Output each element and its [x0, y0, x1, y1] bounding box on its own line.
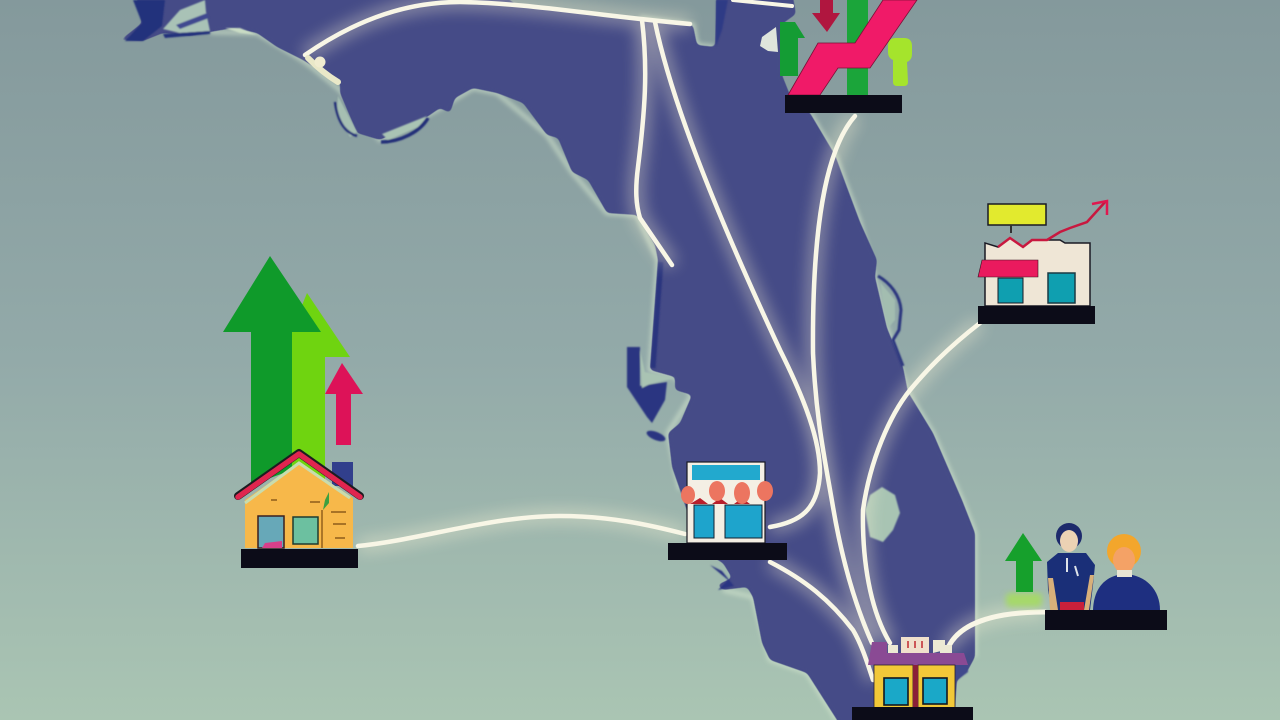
right window [923, 678, 947, 704]
icon: south twin shops [852, 637, 973, 720]
route: top east stripe [733, 0, 792, 6]
person one [1047, 523, 1095, 610]
window [725, 505, 762, 538]
tall green arrow [223, 256, 321, 485]
route: east shop to south shops [863, 323, 980, 643]
pink trend arrow [788, 0, 917, 95]
route: panhandle to north junction [305, 2, 690, 55]
glow behind route lines [305, 2, 1045, 680]
cedar key streak [710, 565, 734, 590]
coastal island near arrow [760, 27, 778, 52]
window [293, 517, 318, 544]
awning red accents [690, 498, 750, 504]
lime arrow [292, 293, 350, 480]
tampa bay pocket [627, 347, 667, 423]
route: people to south shops [947, 612, 1045, 650]
red down arrow [812, 0, 840, 32]
route: north junction to central storefront [655, 22, 820, 527]
green up arrow [780, 22, 805, 76]
building [985, 238, 1090, 306]
panhandle sand bar [225, 28, 257, 35]
person two [1093, 534, 1160, 610]
platform [785, 95, 902, 113]
yellow sign [988, 204, 1046, 233]
barrier island west [337, 96, 357, 137]
route: chart to south shops [813, 116, 872, 643]
barrier island south [382, 116, 427, 140]
west coast shade [653, 262, 661, 368]
small key [645, 429, 667, 443]
building [687, 462, 765, 543]
icon: house with growth arrows [223, 256, 363, 568]
crimson arrow [325, 363, 363, 445]
tall green bar [847, 0, 868, 95]
icon: rising chart on platform [760, 0, 917, 113]
route lines [305, 0, 1045, 680]
route ends white tabs [888, 640, 952, 653]
red trend line [998, 201, 1106, 247]
door [258, 516, 284, 548]
platform [668, 543, 787, 560]
window right [1048, 273, 1075, 303]
lime base [1006, 593, 1042, 607]
lake [865, 487, 900, 542]
south bump [955, 665, 968, 682]
siding marks [271, 500, 346, 548]
awning [978, 260, 1038, 277]
awning scallops [681, 481, 773, 504]
platform [852, 707, 973, 720]
platform [978, 306, 1095, 324]
icon: east shop with rising trend [978, 201, 1107, 324]
route: house to storefront [358, 516, 685, 546]
house wall [245, 462, 353, 548]
chimney [332, 462, 353, 486]
dark strip by north notch [716, 0, 728, 46]
panhandle lagoon [163, 0, 210, 33]
pink doormat [262, 541, 282, 548]
platform [1045, 610, 1167, 630]
lime marker [888, 38, 912, 86]
red arrow head [1092, 201, 1107, 215]
left window [884, 678, 908, 705]
roof [238, 453, 360, 503]
sign band [692, 465, 760, 480]
window left [998, 278, 1023, 303]
leaf [323, 492, 329, 510]
platform [241, 549, 358, 568]
icon: workers with up arrow [1005, 523, 1167, 630]
map details [125, 0, 968, 682]
route: storefront to south shops [770, 562, 873, 680]
coast halo [210, 18, 975, 720]
divider door [913, 665, 918, 708]
green arrow [1005, 533, 1042, 592]
dark strip and left shade [125, 0, 210, 41]
roof [868, 642, 968, 665]
node: panhandle marker [308, 56, 338, 82]
map: Florida [118, 0, 975, 720]
sign [901, 637, 929, 653]
icon: central storefront [668, 462, 787, 560]
right unit [918, 665, 955, 708]
door [694, 505, 714, 538]
east coast island [880, 282, 895, 328]
left unit [874, 665, 913, 708]
route: north junction to gulf coast [636, 20, 672, 265]
